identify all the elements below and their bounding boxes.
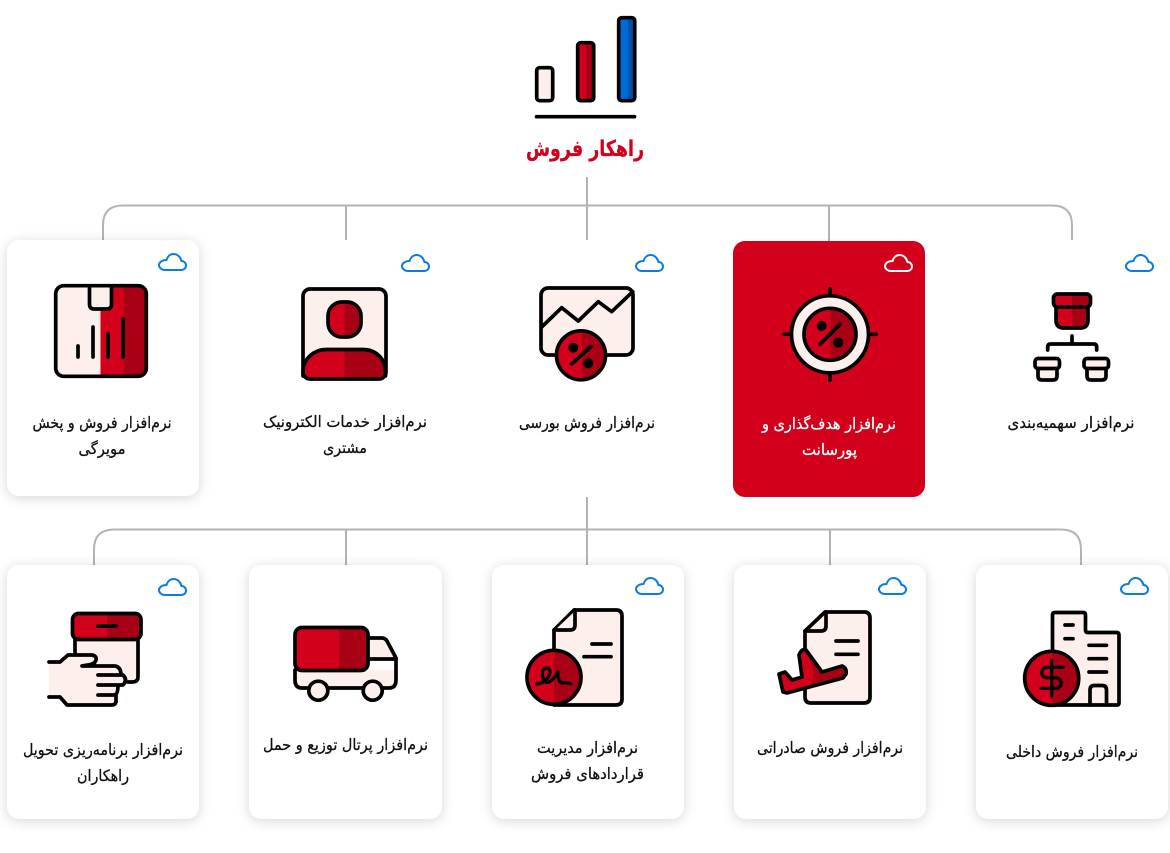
label (531, 739, 644, 784)
label: مشتری (323, 439, 367, 457)
label: قراردادهای فروش (531, 765, 644, 784)
icon: box with bars (56, 286, 146, 376)
card: sales contract management (492, 565, 684, 819)
icon: truck (295, 628, 396, 700)
icon: signed document (527, 610, 622, 705)
label: نرم‌افزار هدف‌گذاری و (761, 415, 896, 434)
label: مویرگی (78, 440, 126, 458)
card: customer electronic services (249, 240, 441, 496)
label: نرم‌افزار سهمیه‌بندی (1008, 414, 1134, 433)
label: نرم‌افزار خدمات الکترونیک (263, 413, 427, 432)
card: domestic sales (976, 565, 1168, 819)
icon: cloud (885, 255, 912, 271)
label: نرم‌افزار فروش صادراتی (757, 739, 903, 758)
icon: cloud (402, 255, 429, 271)
label: نرم‌افزار برنامه‌ریزی تحویل (23, 741, 183, 759)
connector: root to top row (103, 177, 1072, 241)
card: distribution sales software (7, 240, 199, 496)
label: نرم‌افزار مدیریت (537, 739, 638, 757)
icon: cloud (636, 578, 663, 594)
icon: target percent (784, 289, 876, 380)
label (32, 414, 172, 458)
label (761, 415, 896, 460)
icon: cloud (636, 255, 663, 271)
label: نرم‌افزار فروش و پخش (32, 414, 172, 433)
label (263, 413, 427, 457)
card: target and commission (highlighted) (733, 241, 925, 497)
connector: red card to bottom row (94, 497, 1081, 565)
icon: chart with percent (541, 288, 633, 380)
card: quota allocation (976, 240, 1168, 496)
icon: cloud (1126, 255, 1153, 271)
card: distribution portal (249, 565, 442, 819)
title: راهکار فروش (526, 137, 644, 162)
icon: cloud (879, 578, 906, 594)
label: راهکاران (77, 767, 129, 785)
label (23, 741, 183, 785)
icon: hand holding package (49, 614, 141, 705)
label: نرم‌افزار فروش بورسی (519, 414, 655, 433)
icon: cloud (159, 254, 186, 270)
icon: cloud (159, 579, 186, 595)
icon: document with airplane (779, 612, 870, 703)
card: export sales (734, 565, 926, 819)
icon: building with dollar coin (1025, 612, 1119, 705)
label: نرم‌افزار فروش داخلی (1006, 743, 1138, 762)
card: dealer delivery planning (7, 565, 199, 819)
icon: quota hierarchy (1035, 294, 1108, 380)
icon: cloud (1121, 578, 1148, 594)
icon: customer portrait (303, 289, 386, 379)
label: پورسانت (802, 441, 857, 460)
label: نرم‌افزار پرتال توزیع و حمل (263, 736, 428, 755)
root icon: bar chart (536, 18, 635, 117)
card: stock market sales (491, 240, 683, 496)
